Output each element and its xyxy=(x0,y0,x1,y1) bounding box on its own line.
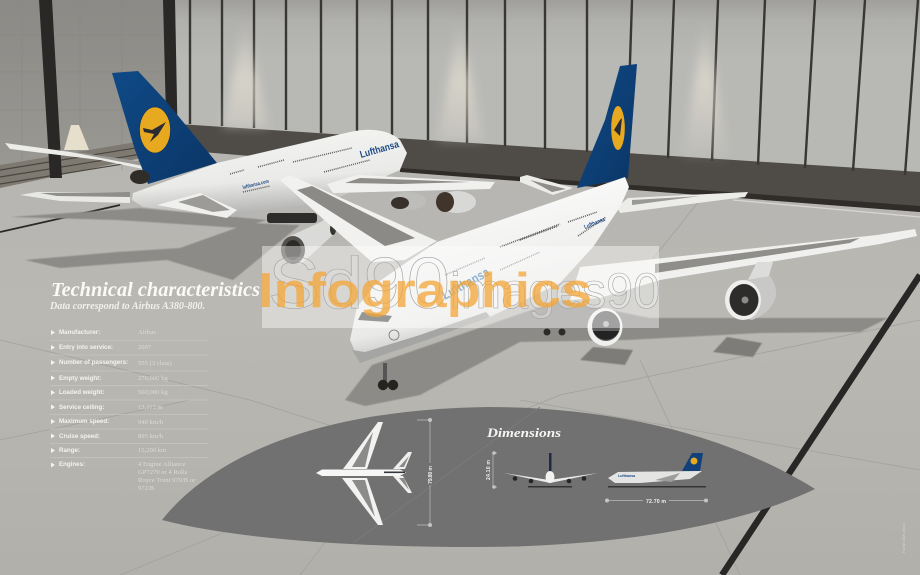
row: entry into service: 2007 xyxy=(138,344,152,351)
row: empty weight xyxy=(59,375,168,382)
row: range xyxy=(59,447,167,454)
front fuselage xyxy=(350,177,629,363)
row: maximum speed: Maximum speed: xyxy=(59,418,109,425)
row: range: Range: xyxy=(59,447,80,454)
image credit: Fuente: DLH, Airbus xyxy=(902,523,906,553)
row: passengers: Number of passengers: xyxy=(59,359,128,366)
rear fuselage markings xyxy=(230,139,401,192)
row: service ceiling xyxy=(59,404,164,411)
watermark panel xyxy=(262,246,659,328)
row: engines: Royce Trent 970/B or xyxy=(138,477,196,484)
row: service ceiling: Service ceiling: xyxy=(59,404,104,411)
front right engines xyxy=(588,262,776,346)
floor shadows xyxy=(10,208,888,406)
row: manufacturer: Airbus xyxy=(138,329,156,336)
row: loaded weight xyxy=(59,389,168,396)
row: loaded weight: Loaded weight: xyxy=(59,389,104,396)
height dimension: 24.10 m: 24.10 m xyxy=(486,460,492,480)
dimensions heading: Dimensions xyxy=(486,425,561,440)
rear tail cone shadow xyxy=(130,170,150,184)
front-view aircraft xyxy=(504,453,598,488)
watermark outline text: small: images90 xyxy=(450,263,660,319)
row: maximum speed: 940 km/h xyxy=(138,419,164,426)
row: loaded weight: 560,000 kg xyxy=(138,389,168,396)
row: empty weight: 276,000 kg xyxy=(138,375,168,382)
row: cruise speed xyxy=(59,433,164,440)
rear main wing xyxy=(327,175,495,193)
row: entry into service: Entry into service: xyxy=(59,344,113,351)
row: cruise speed: 895 km/h xyxy=(138,433,164,440)
front right wing xyxy=(570,229,917,300)
length dimension: 72.70 m xyxy=(605,496,708,505)
concrete pillars xyxy=(39,0,178,178)
front nose underside xyxy=(352,312,490,363)
wall lamp xyxy=(64,125,89,150)
rear engines and gear xyxy=(267,191,476,223)
row: entry into service xyxy=(59,344,152,351)
row: passengers xyxy=(59,359,172,367)
row: manufacturer xyxy=(59,329,156,336)
row markers xyxy=(51,330,55,468)
heading: Technical characteristics xyxy=(51,280,260,301)
rear near wing stub xyxy=(157,193,237,218)
side-view aircraft xyxy=(608,453,706,488)
front aircraft xyxy=(280,64,917,390)
row: engines: GP7270 or 4 Rolls xyxy=(138,469,188,476)
rear fuselage markings: lufthansa.com xyxy=(242,178,270,191)
span dimension: 79.80 m: 79.80 m xyxy=(428,466,434,484)
front fuselage markings xyxy=(358,212,607,340)
top-view aircraft xyxy=(316,422,412,525)
span dimension: 79.80 m xyxy=(417,418,434,527)
side-view aircraft: Lufthansa xyxy=(618,474,636,478)
grey dimensions shape xyxy=(162,407,815,547)
floor guide strip xyxy=(722,275,920,575)
row: service ceiling: 13,115 m xyxy=(138,404,164,411)
front fuselage markings: Lufthansa xyxy=(439,264,492,303)
rear tail logo xyxy=(140,107,170,153)
watermark xyxy=(258,244,660,328)
front tail fin xyxy=(577,64,637,188)
rear stabilizer xyxy=(5,143,143,169)
front tail logo xyxy=(611,106,625,150)
row: engines: 972/B xyxy=(138,485,155,492)
hangar door panel separators xyxy=(190,0,918,175)
watermark outline text: large: Sd90 xyxy=(268,244,450,324)
height dimension: 24.10 m xyxy=(486,451,497,489)
front fuselage markings: Lufthansa xyxy=(584,217,607,231)
rear tail fin xyxy=(112,71,217,184)
engine: outer left xyxy=(281,200,350,265)
row: passengers: 555 (3 class) xyxy=(138,360,172,367)
row: engines: Engines: xyxy=(59,461,85,468)
rear fuselage xyxy=(132,130,407,217)
rear fuselage markings: Lufthansa xyxy=(359,139,401,161)
row: manufacturer: Manufacturer: xyxy=(59,329,100,336)
watermark orange text: Infographics xyxy=(258,264,592,318)
length dimension: 72.70 m: 72.70 m xyxy=(646,499,666,505)
front landing gear xyxy=(378,328,566,390)
technical characteristics panel xyxy=(49,280,260,492)
row: cruise speed: Cruise speed: xyxy=(59,433,100,440)
front left wing xyxy=(280,175,437,262)
row: range: 15,200 km xyxy=(138,447,167,454)
row dividers xyxy=(50,340,208,458)
row: empty weight: Empty weight: xyxy=(59,375,101,382)
front right stabilizer xyxy=(617,192,748,213)
front far stabilizer xyxy=(520,175,573,195)
rear horizontal stabilizer near xyxy=(20,192,130,203)
row: engines xyxy=(59,461,196,492)
wall light cones xyxy=(222,15,728,158)
floor joints xyxy=(0,200,920,575)
rear aircraft xyxy=(5,71,495,223)
row: engines: 4 Engine Alliance xyxy=(138,461,185,468)
subheading: Data correspond to Airbus A380-800. xyxy=(49,301,205,312)
row: maximum speed xyxy=(59,418,164,426)
